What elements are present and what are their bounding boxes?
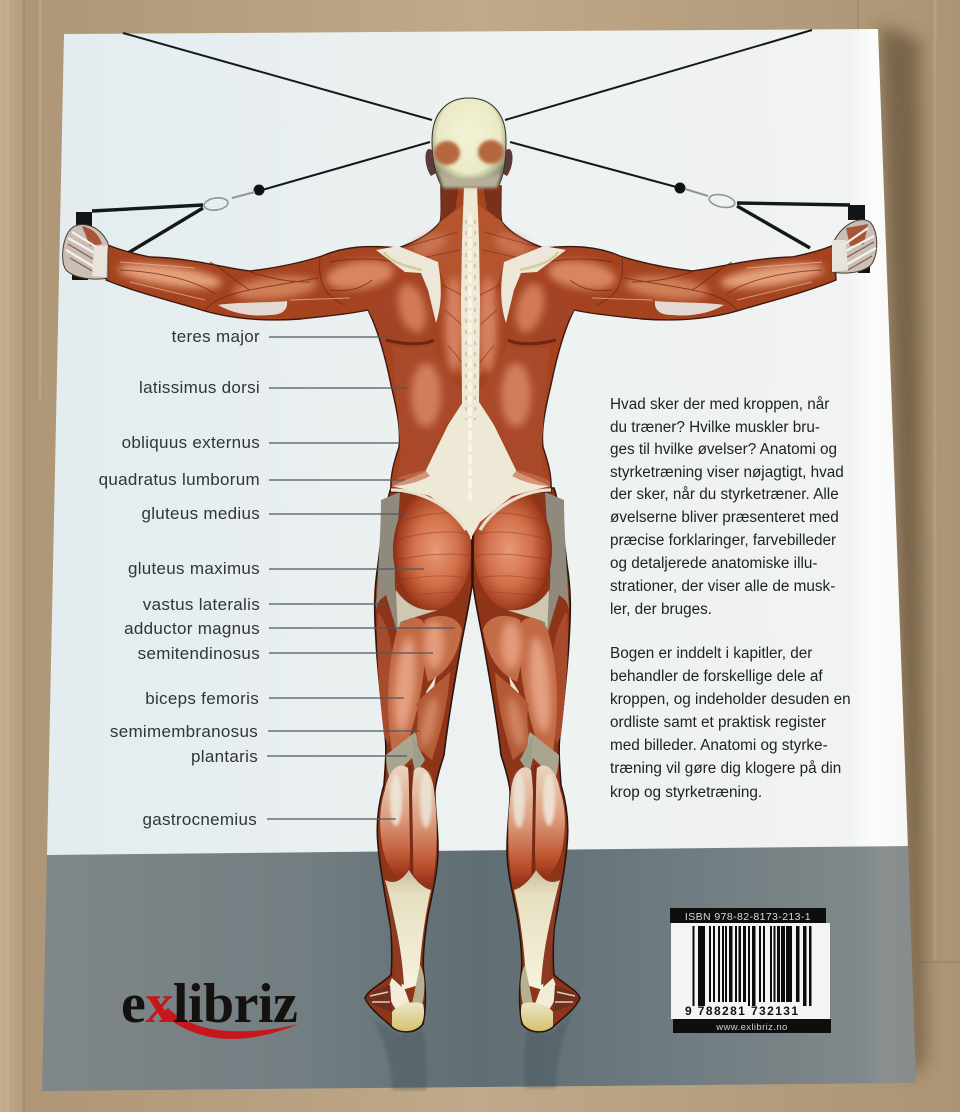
description text paragraph 1: styrketræning viser nøjagtigt, hvad [610, 464, 844, 481]
description text paragraph 1: ler, der bruges. [610, 601, 712, 618]
description text paragraph 2: krop og styrketræning. [610, 784, 762, 801]
floor reflection of feet [372, 1012, 573, 1090]
muscle labels with leader lines [99, 327, 455, 829]
label: vastus lateralis: vastus lateralis [143, 595, 260, 614]
description text paragraph 1: der sker, når du styrketræner. Alle [610, 486, 839, 503]
label: plantaris: plantaris [191, 747, 258, 766]
resistance cables [72, 30, 870, 280]
right hand with wrist band [832, 220, 877, 273]
label: semitendinosus: semitendinosus [138, 644, 260, 663]
barcode block: 9 788281 732131 [685, 1004, 799, 1018]
book back cover: white page [47, 29, 908, 856]
gluteal rim tendon [391, 490, 551, 530]
label: semimembranosus: semimembranosus [110, 722, 258, 741]
description text paragraph 1: og detaljerede anatomiske illu- [610, 555, 817, 572]
label: gastrocnemius: gastrocnemius [143, 810, 257, 829]
description text paragraph 1 [610, 396, 844, 618]
description text paragraph 2: Bogen er inddelt i kapitler, der [610, 645, 812, 662]
description text paragraph 1: øvelserne bliver præsenteret med [610, 509, 839, 526]
anatomical back figure [63, 98, 877, 1090]
label: adductor magnus: adductor magnus [124, 619, 260, 638]
right torso and arm [470, 186, 836, 540]
label: latissimus dorsi: latissimus dorsi [139, 378, 260, 397]
barcode block: www.exlibriz.no [715, 1022, 788, 1033]
description text paragraph 1: præcise forklaringer, farvebilleder [610, 532, 836, 549]
description text paragraph 1: ges til hvilke øvelser? Anatomi og [610, 441, 837, 458]
right leg [473, 488, 580, 1032]
description text paragraph 2: ordliste samt et praktisk register [610, 714, 826, 731]
description text paragraph 2 [610, 645, 851, 801]
description text paragraph 2: med billeder. Anatomi og styrke- [610, 737, 828, 754]
semimembranosus [414, 672, 450, 760]
barcode bars [692, 926, 812, 1006]
exlibriz logo: exlibriz [121, 973, 297, 1035]
description text paragraph 1: Hvad sker der med kroppen, når [610, 396, 829, 413]
description text paragraph 2: træning vil gøre dig klogere på din [610, 760, 841, 777]
book back cover: grey floor band [42, 846, 916, 1091]
label: gluteus medius: gluteus medius [141, 504, 260, 523]
left torso and arm [106, 186, 472, 540]
left leg [365, 488, 472, 1032]
barcode block [670, 908, 831, 1033]
label: biceps femoris: biceps femoris [145, 689, 259, 708]
left hand with wrist band [63, 225, 108, 279]
spine [461, 186, 480, 530]
label: teres major: teres major [172, 327, 260, 346]
description text paragraph 2: behandler de forskellige dele af [610, 668, 823, 685]
description text paragraph 1: strationer, der viser alle de musk- [610, 578, 835, 595]
gluteus maximus muscle [393, 490, 471, 610]
semitendinosus [423, 616, 462, 682]
label: obliquus externus: obliquus externus [122, 433, 260, 452]
biceps femoris [388, 618, 426, 752]
barcode block: ISBN 978-82-8173-213-1 [685, 911, 811, 923]
label: quadratus lumborum: quadratus lumborum [99, 470, 260, 489]
description text paragraph 1: du træner? Hvilke muskler bru- [610, 419, 820, 436]
vastus lateralis [377, 612, 394, 745]
description text paragraph 2: kroppen, og indeholder desuden en [610, 691, 851, 708]
label: gluteus maximus: gluteus maximus [128, 559, 260, 578]
head [425, 98, 513, 188]
